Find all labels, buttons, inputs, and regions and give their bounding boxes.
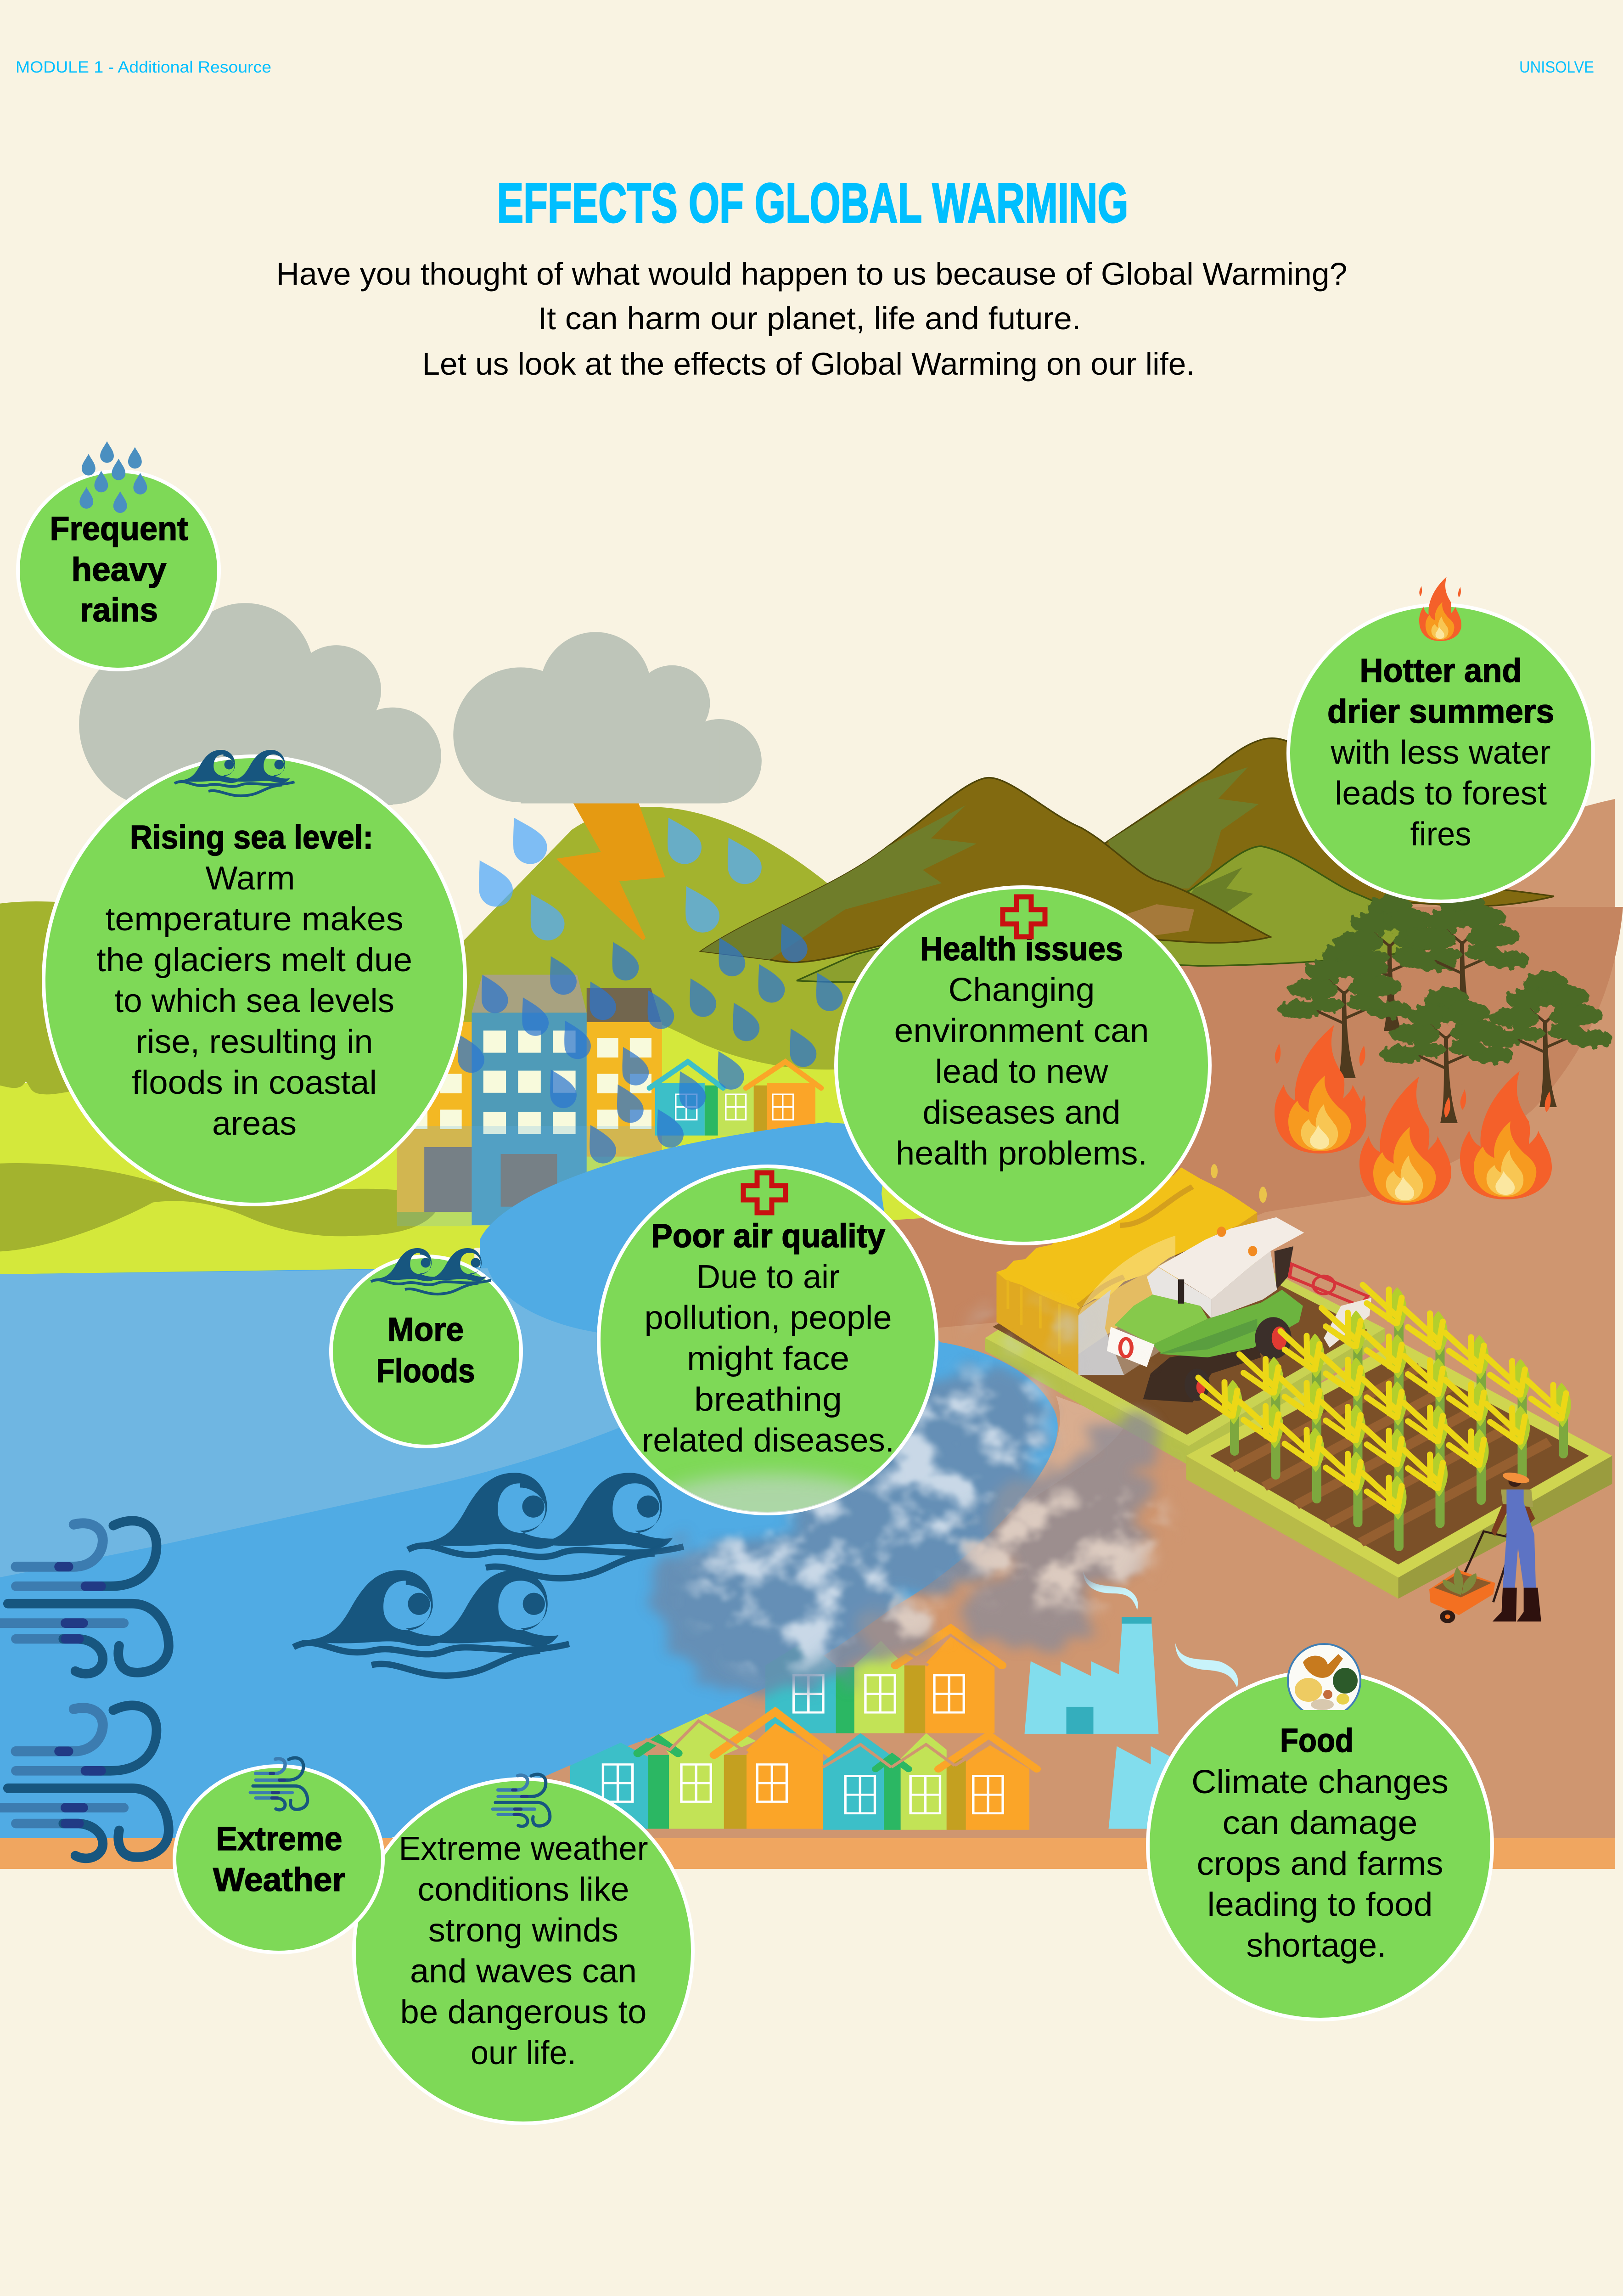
text: more floods: More (387, 1311, 464, 1348)
cloud: left (79, 603, 441, 809)
text: food: can damage (1222, 1805, 1418, 1841)
mountain: green (797, 846, 1455, 982)
smoke: warm puffs over land (871, 1483, 1166, 1644)
cloud: right (453, 632, 762, 804)
text: more floods (376, 1311, 475, 1390)
text: health issues: health problems. (896, 1135, 1147, 1172)
river (0, 1122, 1058, 1838)
panel: frequent heavy rains (18, 441, 219, 670)
factory: rear (1024, 1617, 1158, 1734)
text: extreme weather description: Extreme weather (399, 1830, 648, 1867)
intro text block: It can harm our planet, life and future. (538, 301, 1081, 336)
header: unisolve label: UNISOLVE (1519, 58, 1594, 76)
text: poor air quality: Due to air (696, 1259, 840, 1295)
text: extreme weather description: our life. (471, 2035, 576, 2071)
text: health issues: Health issues (920, 931, 1123, 968)
icon: flame (1419, 577, 1461, 641)
river: pale lobe over land (1002, 1396, 1125, 1521)
text: extreme weather description (399, 1830, 648, 2071)
text: rising sea level: temperature makes (106, 901, 403, 938)
factory: front (1108, 1746, 1191, 1829)
text: hotter and drier summers: with less water (1330, 734, 1551, 771)
text: poor air quality: breathing (694, 1381, 842, 1418)
text: hotter and drier summers: drier summers (1327, 693, 1554, 730)
text: health issues: diseases and (923, 1094, 1120, 1131)
harvester machine (1078, 1217, 1371, 1402)
text: poor air quality: Poor air quality (651, 1218, 885, 1255)
houses: front row right (823, 1733, 1037, 1830)
factory steam: rear (1083, 1571, 1138, 1610)
panel: more floods (331, 1248, 521, 1446)
text: hotter and drier summers: leads to forest (1335, 775, 1547, 812)
smoke overlapping the circle (669, 1463, 868, 1513)
icon: waves (371, 1248, 491, 1294)
text: food: crops and farms (1196, 1846, 1443, 1882)
text: hotter and drier summers (1327, 653, 1554, 853)
icon: food plate (1288, 1644, 1360, 1717)
icon: waves (174, 750, 295, 796)
text: extreme weather: Weather (213, 1862, 345, 1898)
farmer with wheelbarrow (1429, 1470, 1541, 1623)
text: health issues: environment can (894, 1013, 1149, 1049)
river: light band (0, 1268, 826, 1577)
houses: front row left (570, 1712, 832, 1829)
lightning bolt (556, 801, 665, 940)
intro text block: Have you thought of what would happen to us because of Global Warming? (276, 256, 1347, 292)
text: poor air quality: related diseases. (642, 1422, 894, 1459)
trees (1278, 892, 1612, 1123)
houses (570, 1571, 1191, 1830)
text: poor air quality: pollution, people (645, 1300, 892, 1336)
landscape: left hills (0, 901, 474, 1276)
smoke near harvester (978, 1309, 1143, 1401)
text: frequent heavy rains: rains (80, 592, 158, 629)
panel: rising sea level (44, 750, 465, 1204)
large waves: upper (408, 1473, 684, 1578)
text: frequent heavy rains: heavy (72, 551, 166, 588)
text: food: shortage. (1246, 1927, 1387, 1964)
harvester field (985, 1164, 1385, 1465)
corn field (1186, 1285, 1612, 1598)
panel: poor air quality (599, 1166, 937, 1548)
text: health issues: Changing (949, 972, 1095, 1008)
text: hotter and drier summers: fires (1410, 816, 1471, 853)
text: extreme weather description: and waves can (410, 1953, 637, 1990)
wheat block (996, 1164, 1267, 1375)
rain: large drops (479, 818, 762, 940)
header: module label: MODULE 1 - Additional Resource (16, 58, 271, 76)
intro text block: Let us look at the effects of Global Warming on our life. (422, 346, 1195, 382)
text: frequent heavy rains (50, 511, 188, 629)
text: extreme weather: Extreme (216, 1821, 343, 1857)
smoke: pale puffs over water (691, 1370, 1047, 1672)
pollution smoke (653, 1367, 1166, 1695)
text: more floods: Floods (376, 1353, 475, 1390)
houses: back row (765, 1628, 1002, 1733)
text: food: Food (1280, 1722, 1353, 1759)
text: food (1191, 1722, 1449, 1964)
harvest platform (985, 1221, 1385, 1465)
clouds (79, 603, 762, 940)
text: health issues (894, 931, 1149, 1172)
mountains (701, 738, 1554, 982)
corn field platform (1186, 1341, 1612, 1598)
text: health issues: lead to new (935, 1053, 1109, 1090)
rain: small drops (458, 923, 843, 1164)
text: rising sea level: floods in coastal (132, 1064, 377, 1101)
panel: extreme weather description (354, 1774, 693, 2123)
small houses behind the river (649, 1062, 821, 1136)
text: rising sea level: to which sea levels (114, 983, 394, 1019)
panel: hotter and drier summers (1288, 577, 1593, 901)
landscape: brown land (459, 799, 1623, 1838)
text: hotter and drier summers: Hotter and (1360, 653, 1522, 689)
building: left (397, 1022, 472, 1212)
panel: extreme weather (174, 1758, 383, 1953)
text: poor air quality (642, 1218, 894, 1459)
building: blue tower (472, 975, 587, 1225)
building: right (587, 988, 662, 1157)
mountain: front (701, 778, 1270, 962)
text: extreme weather description: be dangerous to (400, 1994, 646, 2031)
icon: wind (493, 1774, 550, 1826)
icon: wind (250, 1758, 308, 1810)
smoke: dark base (653, 1367, 1162, 1695)
text: rising sea level (96, 819, 412, 1142)
bottom orange ground band (0, 1838, 1615, 1869)
title: EFFECTS OF GLOBAL WARMING (497, 172, 1129, 234)
text: rising sea level: areas (212, 1105, 297, 1142)
forest fires (1275, 1025, 1552, 1205)
icon: rain drops (79, 441, 147, 513)
panel: health issues (836, 887, 1210, 1244)
icon: red cross (1003, 897, 1045, 937)
text: rising sea level: the glaciers melt due (96, 942, 412, 979)
city buildings (397, 975, 821, 1226)
wind: lower (0, 1705, 168, 1858)
text: extreme weather (213, 1821, 345, 1898)
text: food: leading to food (1207, 1886, 1432, 1923)
text: extreme weather description: conditions like (418, 1871, 629, 1908)
corn plants (1198, 1285, 1571, 1551)
panel: food (1148, 1644, 1492, 2020)
intro text block (276, 256, 1347, 382)
large waves: lower (293, 1570, 569, 1676)
rain drops (458, 818, 843, 1164)
text: rising sea level: rise, resulting in (136, 1024, 373, 1060)
factory steam: front (1175, 1643, 1238, 1688)
text: extreme weather description: strong winds (428, 1912, 618, 1949)
text: poor air quality: might face (687, 1340, 849, 1377)
text: food: Climate changes (1191, 1764, 1449, 1801)
wind: upper (0, 1521, 168, 1674)
text: rising sea level: Warm (206, 860, 295, 897)
text: frequent heavy rains: Frequent (50, 511, 188, 547)
icon: red cross (743, 1173, 786, 1213)
green hill (369, 807, 949, 1069)
mountain: rear (1049, 738, 1554, 910)
text: rising sea level: Rising sea level: (130, 819, 373, 856)
lime patch below the hill (459, 1010, 941, 1249)
